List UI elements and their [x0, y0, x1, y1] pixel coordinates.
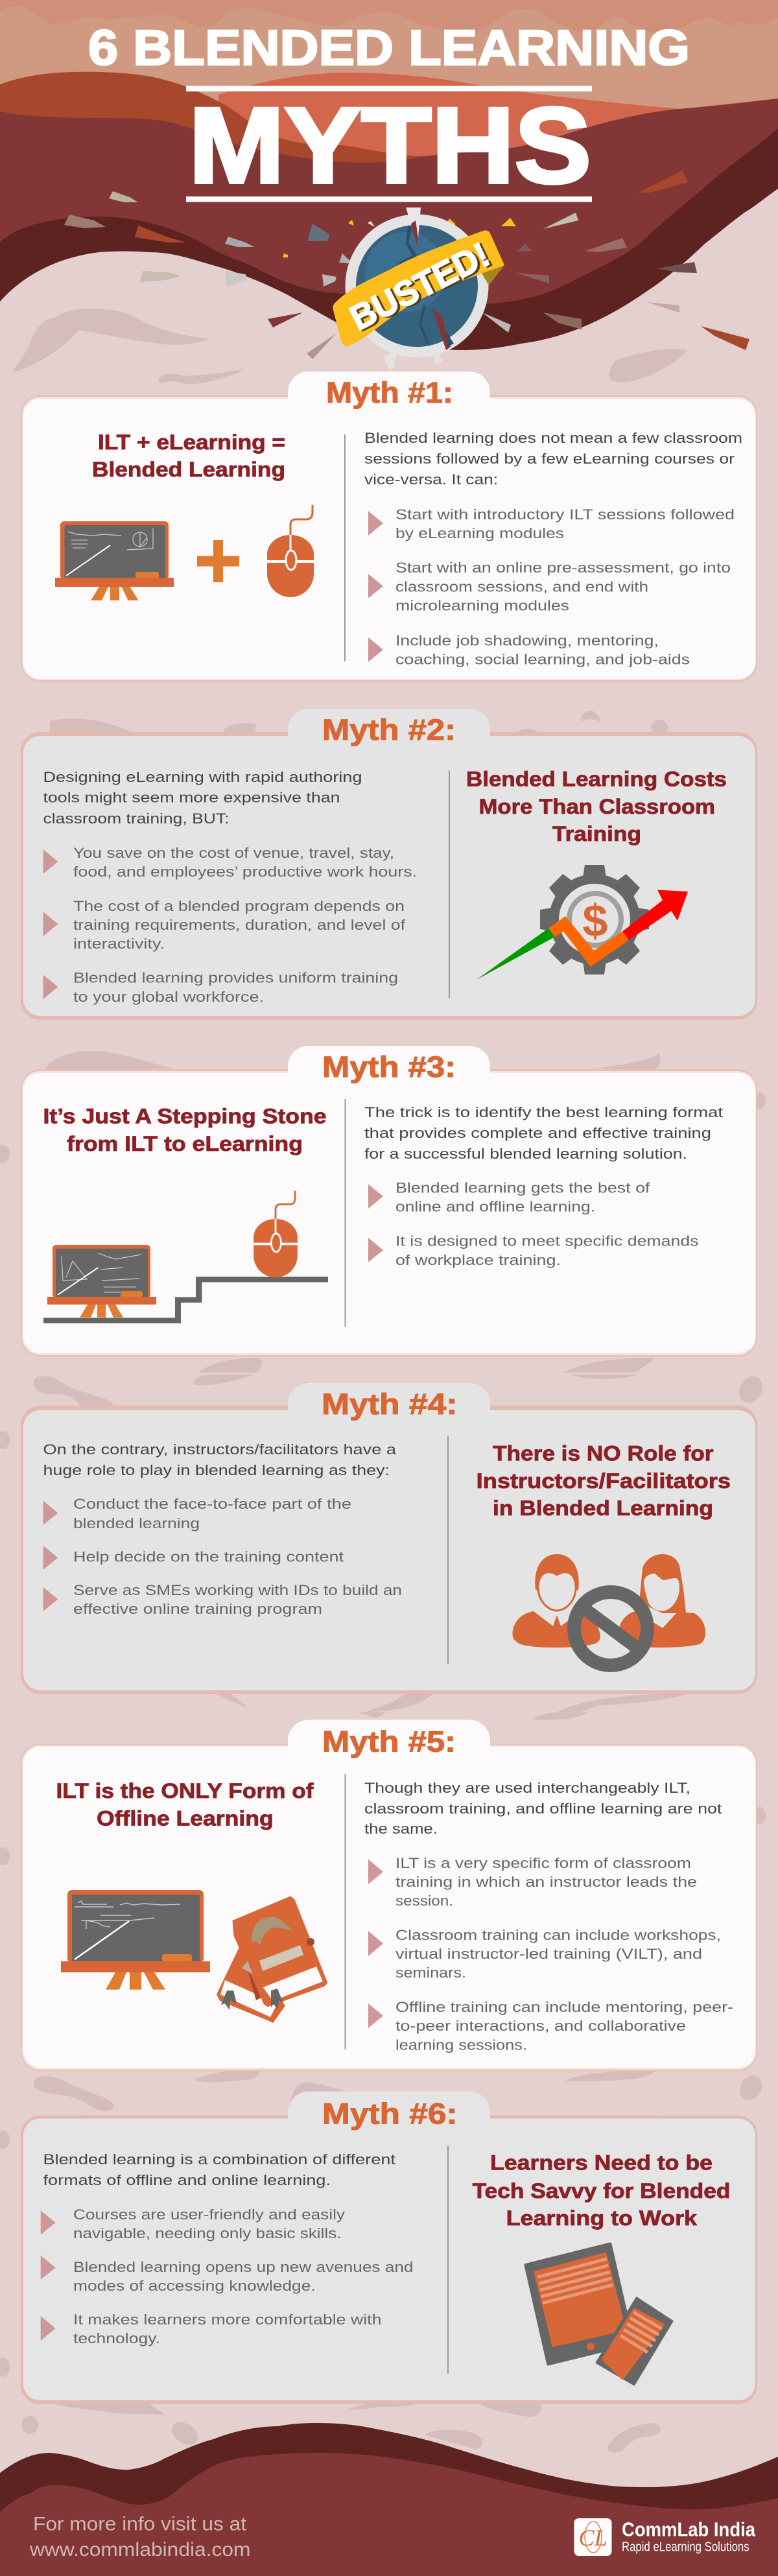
myth 4 intro text: On the contrary, instructors/facilitators have a [43, 1441, 397, 1458]
myth 3 intro text [364, 1104, 723, 1162]
myth 1 claim heading [92, 431, 285, 481]
myth 1 claim heading: ILT + eLearning = [98, 431, 285, 454]
bullet 2 [43, 1546, 344, 1570]
icon: instructors with prohibition sign [512, 1554, 705, 1665]
bullet 3 [43, 970, 398, 1005]
divider [344, 434, 346, 661]
bullet 2: classroom sessions, and end with [395, 578, 648, 595]
bullet 2 [368, 1233, 699, 1268]
icon: blackboard [47, 1245, 156, 1318]
myth 6 claim heading: Learning to Work [506, 2206, 697, 2230]
bullet 1: Conduct the face-to-face part of the [73, 1496, 351, 1512]
bullet 1: session. [395, 1893, 453, 1909]
bullet 3: It makes learners more comfortable with [73, 2311, 381, 2328]
panel: myth 2 [21, 709, 757, 1019]
myth 2 claim heading: More Than Classroom [478, 795, 715, 818]
divider [447, 2146, 449, 2374]
panel: myth 3 [21, 1046, 757, 1356]
bullet 1: food, and employees’ productive work hours. [73, 864, 417, 880]
busted label: BUSTED! [344, 235, 495, 338]
myth 5 claim heading: Offline Learning [97, 1807, 274, 1830]
bullet 1: training in which an instructor leads the [395, 1874, 697, 1890]
myth 4 intro text: huge role to play in blended learning as they: [43, 1462, 390, 1478]
bullet 1: navigable, needing only basic skills. [73, 2225, 341, 2241]
bullet 2: modes of accessing knowledge. [73, 2278, 316, 2294]
bullet 2: interactivity. [73, 936, 165, 952]
bullet 2: virtual instructor-led training (VILT), and [395, 1946, 702, 1962]
title rule top [186, 86, 592, 91]
myth 5 intro text: Though they are used interchangeably ILT, [364, 1780, 690, 1796]
bullet 2: Classroom training can include workshops, [395, 1927, 721, 1943]
myth 3 intro text: that provides complete and effective training [364, 1125, 711, 1141]
myth 6 intro text: formats of offline and online learning. [43, 2172, 331, 2188]
myth 2 intro text [43, 769, 362, 827]
bullet 1: Courses are user-friendly and easily [73, 2206, 345, 2223]
icon: plus [197, 540, 239, 582]
logo: CommLab India [574, 2518, 756, 2556]
title: Myths: MYTHS [189, 86, 591, 206]
logo: CommLab India: Rapid eLearning Solutions [622, 2540, 749, 2555]
bullet 1: by eLearning modules [395, 525, 564, 541]
bullet 3: to your global workforce. [73, 989, 264, 1005]
bullet 2: microlearning modules [395, 598, 569, 613]
bullet 1 [41, 2206, 345, 2241]
myth 5 claim heading: ILT is the ONLY Form of [56, 1779, 314, 1802]
footer call to action text [29, 2514, 250, 2560]
myth 4 claim heading: There is NO Role for [493, 1442, 713, 1465]
myth 6 badge label: Myth #6: [322, 2097, 458, 2130]
bullet 3: Blended learning provides uniform training [73, 970, 398, 986]
myth 3 intro text: for a successful blended learning solution. [364, 1146, 687, 1162]
panel: myth 6 [21, 2092, 757, 2404]
myth 1 intro text: vice-versa. It can: [364, 471, 498, 488]
bullet 2 [43, 898, 406, 952]
bullet 1: blended learning [73, 1515, 200, 1531]
bullet 1: ILT is a very specific form of classroom [395, 1855, 691, 1871]
bullet 2 [368, 560, 731, 613]
myth 5 claim heading [56, 1779, 314, 1830]
divider [449, 770, 450, 998]
bullet 3: learning sessions. [395, 2037, 527, 2053]
divider [345, 1774, 346, 2050]
icon: blackboard [61, 1890, 210, 1990]
myth 5 intro text: the same. [364, 1821, 438, 1837]
title: 6 Blended Learning: 6 BLENDED LEARNING [88, 20, 690, 76]
myth 2 claim heading: Blended Learning Costs [466, 768, 727, 791]
myth 5 intro text [364, 1780, 722, 1837]
bullet 1 [43, 1496, 351, 1531]
myth 4 claim heading: in Blended Learning [493, 1496, 713, 1520]
bullet 3 [43, 1582, 402, 1617]
myth 6 intro text [43, 2151, 395, 2188]
logo: CommLab India: CL [578, 2525, 607, 2551]
icon: books [217, 1897, 327, 2023]
myth 2 intro text: tools might seem more expensive than [43, 790, 340, 805]
myth 3 claim heading: from ILT to eLearning [67, 1132, 303, 1155]
bullet 2: The cost of a blended program depends on [73, 898, 405, 914]
bullet 3 [368, 1999, 733, 2053]
bullet 2 [41, 2256, 413, 2294]
myth 2 claim heading [466, 768, 727, 845]
footer call to action text: www.commlabindia.com [29, 2539, 250, 2560]
myth 6 claim heading: Tech Savvy for Blended [473, 2179, 730, 2203]
bullet 2: It is designed to meet specific demands [395, 1233, 699, 1249]
myth 1 intro text: sessions followed by a few eLearning courses or [364, 451, 735, 467]
bullet 3: Serve as SMEs working with IDs to build an [73, 1582, 402, 1598]
bullet 2: of workplace training. [395, 1252, 561, 1268]
icon: blackboard [55, 521, 174, 600]
bullet 1: You save on the cost of venue, travel, stay, [73, 845, 394, 861]
busted shield icon [333, 207, 504, 370]
bullet 3: technology. [73, 2330, 160, 2346]
bullet 1: Start with introductory ILT sessions followed [395, 506, 735, 523]
myth 6 claim heading [473, 2151, 730, 2230]
bullet 3: effective online training program [73, 1601, 322, 1617]
bullet 1 [43, 845, 417, 880]
myth 3 badge label: Myth #3: [322, 1050, 456, 1083]
bullet 1 [368, 506, 735, 541]
myth 2 intro text: Designing eLearning with rapid authoring [43, 769, 362, 785]
panel: myth 1 [21, 372, 757, 682]
divider [345, 1099, 346, 1327]
myth 4 badge label: Myth #4: [322, 1388, 458, 1421]
bullet 1 [368, 1855, 697, 1909]
footer waves [0, 2423, 778, 2576]
myth 4 claim heading: Instructors/Facilitators [477, 1469, 731, 1493]
myth 3 intro text: The trick is to identify the best learning format [364, 1104, 723, 1120]
flying shield shards [64, 171, 749, 359]
myth 6 intro text: Blended learning is a combination of different [43, 2151, 395, 2168]
icon: stairs [43, 1277, 328, 1323]
bullet 3: coaching, social learning, and job-aids [395, 651, 690, 668]
myth 6 claim heading: Learners Need to be [490, 2151, 713, 2175]
myth 2 intro text: classroom training, BUT: [43, 810, 230, 827]
myth 3 claim heading [43, 1105, 327, 1155]
panel: myth 5 [21, 1719, 757, 2072]
panel: myth 4 [21, 1383, 757, 1694]
bullet 2: seminars. [395, 1965, 466, 1981]
bullet 3 [368, 633, 690, 668]
bullet 3 [41, 2311, 381, 2346]
icon: mouse [267, 505, 314, 597]
logo: CommLab India: CommLab India [622, 2518, 756, 2540]
myth 2 claim heading: Training [552, 822, 641, 845]
footer call to action text: For more info visit us at [33, 2514, 247, 2535]
bullet 3: Offline training can include mentoring, peer- [395, 1999, 733, 2015]
title rule bottom [186, 196, 592, 202]
myth 5 intro text: classroom training, and offline learning are not [364, 1801, 722, 1817]
myth 4 claim heading [477, 1442, 731, 1520]
myth 4 intro text [43, 1441, 397, 1478]
bullet 2: training requirements, duration, and level of [73, 917, 406, 933]
myth 3 claim heading: It’s Just A Stepping Stone [43, 1105, 327, 1128]
bullet 1: online and offline learning. [395, 1199, 595, 1215]
bullet 2: Blended learning opens up new avenues and [73, 2259, 414, 2275]
bullet 2: Start with an online pre-assessment, go into [395, 560, 731, 576]
icon: mouse [253, 1191, 298, 1277]
myth 1 claim heading: Blended Learning [92, 458, 285, 481]
divider [447, 1436, 449, 1664]
icon: tablet and phone [526, 2244, 672, 2385]
myth 1 intro text: Blended learning does not mean a few classroom [364, 430, 742, 446]
icon: gear with dollar and trend arrow: $ [583, 895, 607, 946]
bullet 2: Help decide on the training content [73, 1548, 344, 1565]
myth 5 badge label: Myth #5: [322, 1725, 456, 1758]
bullet 1 [368, 1180, 651, 1215]
bullet 3: Include job shadowing, mentoring, [395, 633, 659, 648]
icon: gear with dollar and trend arrow [477, 865, 688, 980]
header background waves [0, 0, 778, 415]
bullet 3: to-peer interactions, and collaborative [395, 2018, 686, 2034]
bullet 2 [368, 1927, 721, 1981]
myth 1 badge label: Myth #1: [326, 376, 453, 409]
myth 2 badge label: Myth #2: [322, 713, 456, 746]
myth 1 intro text [364, 430, 742, 488]
bullet 1: Blended learning gets the best of [395, 1180, 651, 1196]
